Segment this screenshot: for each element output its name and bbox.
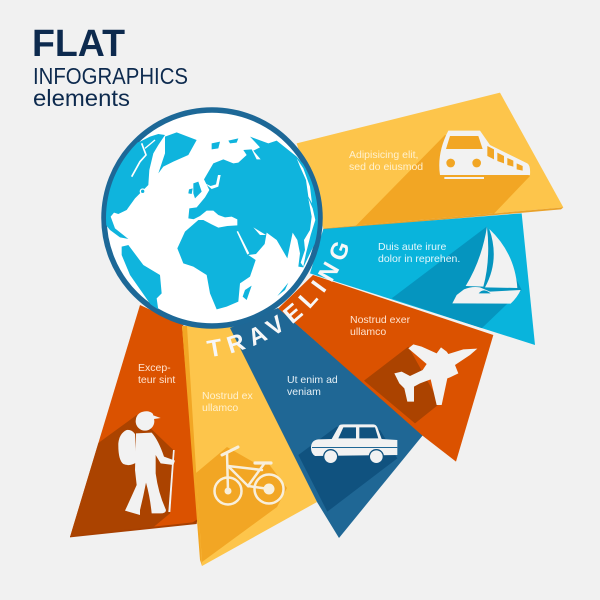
panel: airplane (278, 275, 493, 462)
continent: Greenland (158, 132, 197, 173)
text: car label: veniam (287, 386, 321, 398)
icon: hiker (118, 411, 175, 515)
text: airplane label: Nostrud exer (350, 314, 410, 326)
text: car label: Ut enim ad (287, 374, 338, 386)
continent: North America (106, 134, 165, 239)
heading: TRAVELING arc: TRAVELING (206, 242, 348, 356)
icon: bicycle (214, 447, 284, 504)
icon: sailboat (452, 227, 521, 304)
title: INFOGRAPHICS (33, 63, 188, 89)
continent: Eurasia and Africa (177, 137, 323, 309)
text: bicycle label: Nostrud ex (202, 390, 253, 402)
text: train label: Adipisicing elit, (349, 149, 418, 161)
text: hiker label: Excep- (138, 362, 171, 374)
islands (188, 138, 288, 300)
title (32, 23, 188, 111)
panel: bicycle (182, 326, 317, 566)
seas: Mediterranean, Red Sea and Gulf (193, 158, 315, 267)
globe (97, 110, 323, 326)
text: bicycle label: ullamco (202, 402, 238, 414)
icon: train (439, 131, 530, 179)
panel: car (230, 308, 423, 538)
title: FLAT (32, 23, 125, 65)
text: airplane label: ullamco (350, 326, 386, 338)
title: elements (33, 85, 130, 111)
panel: sailboat (310, 213, 535, 345)
text: hiker label: teur sint (138, 374, 175, 386)
panel: hiker (70, 305, 197, 537)
text: sailboat label: dolor in reprehen. (378, 253, 460, 265)
icon: airplane (394, 344, 477, 405)
text: sailboat label: Duis aute irure (378, 241, 446, 253)
panel: train (297, 93, 563, 230)
text: train label: sed do eiusmod (349, 161, 423, 173)
icon: car (311, 424, 397, 464)
continent: South America (122, 245, 162, 310)
